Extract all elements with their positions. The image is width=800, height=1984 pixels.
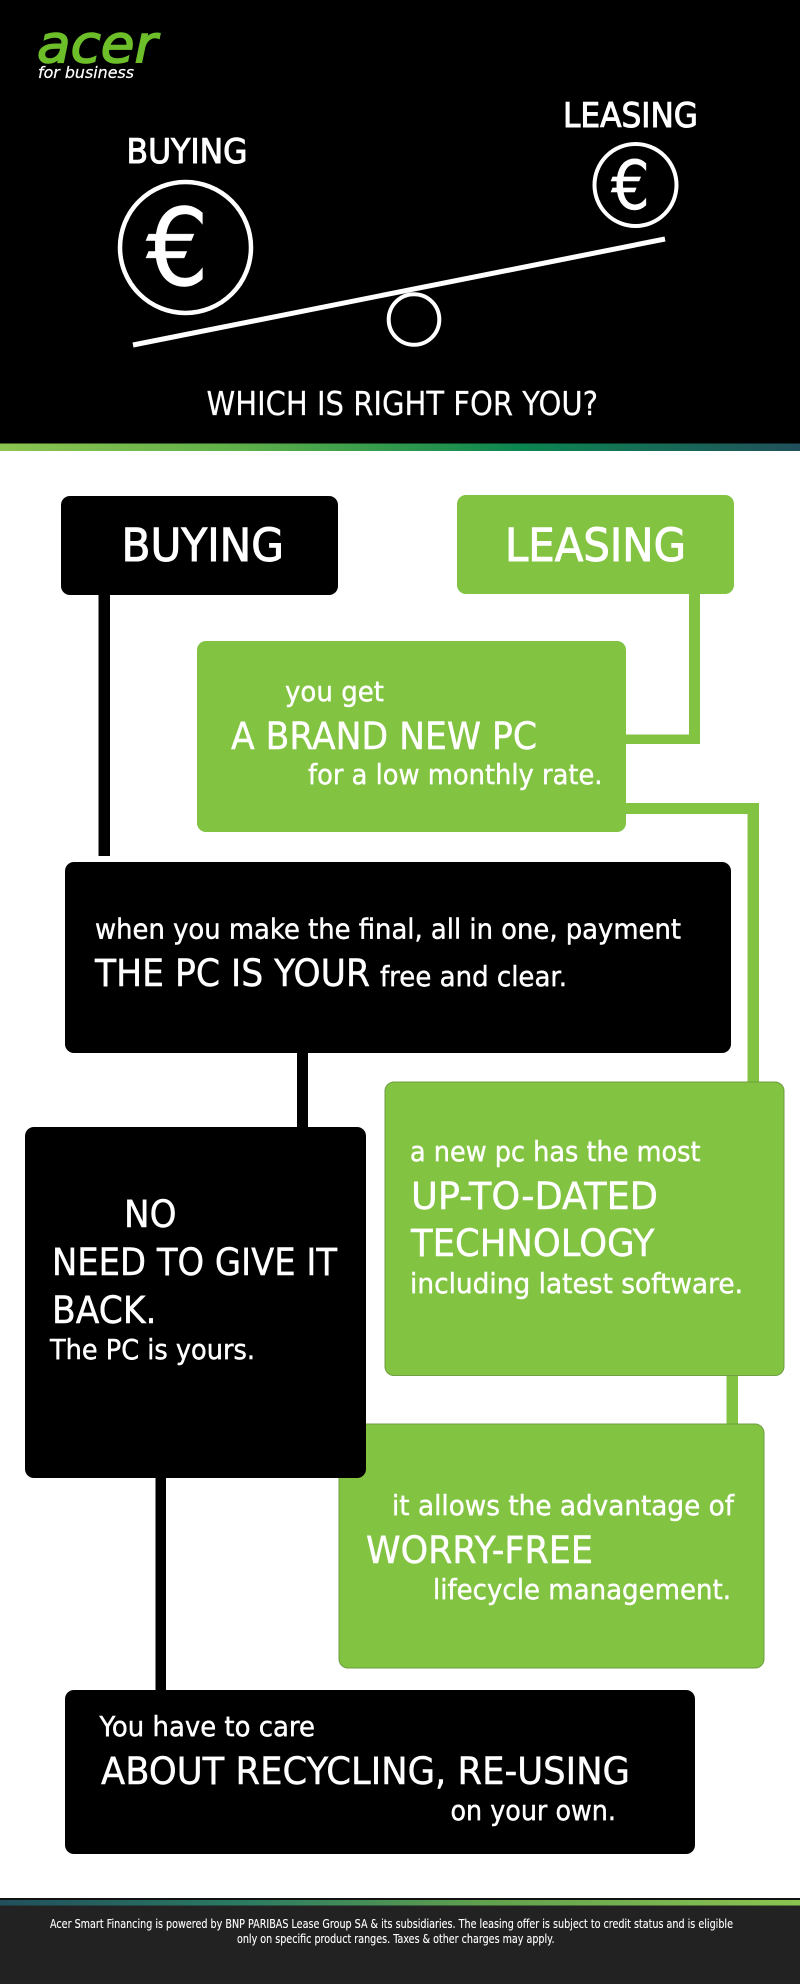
panel: no need to give it back: NEED TO GIVE IT bbox=[52, 1241, 337, 1284]
panel: brand new pc bbox=[197, 641, 626, 832]
panel: brand new pc: you get bbox=[285, 675, 384, 708]
panel: buying heading bbox=[61, 496, 338, 595]
panel: no need to give it back bbox=[25, 1127, 366, 1478]
connector: up-to-dated to worry-free bbox=[726, 1375, 738, 1425]
header banner bbox=[0, 0, 800, 451]
connector: buying line 2 bbox=[297, 1053, 308, 1128]
footer disclaimer text: only on specific product ranges. Taxes & other charges may apply. bbox=[237, 1932, 554, 1946]
gradient strip above footer bbox=[0, 1900, 800, 1906]
icon: large euro coin bbox=[120, 182, 251, 313]
panel: recycling and re-using bbox=[65, 1690, 695, 1854]
connector: buying line 3 bbox=[156, 1477, 166, 1692]
acer for business logo: acer bbox=[37, 16, 161, 76]
panel: leasing heading bbox=[457, 495, 734, 594]
panel: up-to-dated technology: including latest software. bbox=[410, 1267, 743, 1300]
panel: worry-free lifecycle: WORRY-FREE bbox=[366, 1529, 593, 1572]
panel: buying heading: BUYING bbox=[122, 519, 284, 572]
label: buying: BUYING bbox=[126, 132, 248, 172]
panel: the pc is yours free and clear: THE PC IS YOUR bbox=[94, 952, 370, 995]
icon: large euro coin: € bbox=[146, 187, 209, 311]
icon: small euro coin: € bbox=[611, 147, 650, 226]
panel: the pc is yours free and clear bbox=[65, 862, 731, 1053]
icon: small euro coin bbox=[594, 144, 676, 226]
panel: up-to-dated technology: UP-TO-DATED bbox=[411, 1175, 658, 1218]
panel: recycling and re-using: You have to care bbox=[99, 1710, 315, 1743]
panel: worry-free lifecycle bbox=[339, 1424, 764, 1668]
panel: up-to-dated technology: TECHNOLOGY bbox=[410, 1222, 655, 1265]
label: leasing: LEASING bbox=[563, 96, 698, 136]
panel: leasing heading: LEASING bbox=[505, 519, 686, 572]
connector: buying line 1 bbox=[98, 595, 110, 856]
panel: up-to-dated technology: a new pc has the most bbox=[410, 1135, 701, 1168]
title: WHICH IS RIGHT FOR YOU? bbox=[206, 384, 598, 423]
panel: recycling and re-using: ABOUT RECYCLING, RE-USING bbox=[101, 1750, 630, 1793]
panel: no need to give it back: NO bbox=[124, 1193, 176, 1236]
connector: brand new pc to up-to-dated bbox=[626, 803, 759, 1083]
seesaw beam bbox=[133, 239, 665, 345]
panel: worry-free lifecycle: lifecycle management. bbox=[433, 1573, 731, 1606]
panel: brand new pc: for a low monthly rate. bbox=[308, 758, 602, 791]
panel: no need to give it back: The PC is yours. bbox=[49, 1333, 255, 1366]
acer for business logo: for business bbox=[38, 63, 134, 82]
footer bbox=[0, 1898, 800, 1984]
footer disclaimer text bbox=[50, 1917, 733, 1946]
connector: leasing to brand new pc bbox=[626, 594, 700, 744]
panel: the pc is yours free and clear: free and clear. bbox=[380, 960, 567, 993]
panel: the pc is yours free and clear: when you make the final, all in one, payment bbox=[95, 912, 681, 946]
panel: brand new pc: A BRAND NEW PC bbox=[231, 715, 537, 758]
panel: up-to-dated technology bbox=[385, 1082, 784, 1376]
gradient strip under header bbox=[0, 444, 800, 451]
panel: no need to give it back: BACK. bbox=[52, 1289, 156, 1332]
panel: recycling and re-using: on your own. bbox=[450, 1794, 616, 1827]
seesaw fulcrum bbox=[389, 294, 439, 345]
panel: worry-free lifecycle: it allows the advantage of bbox=[392, 1489, 735, 1522]
